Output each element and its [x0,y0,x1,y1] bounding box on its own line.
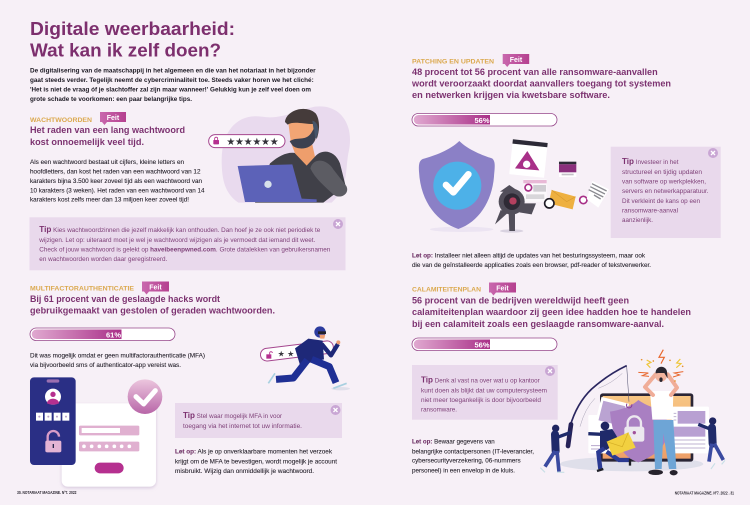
tip text: Tip Denk al vast na over wat u op kantoor [421,376,540,384]
note: let op patching: die van de geïnstalleerde applicaties zoals een browser, pdf-reader of tekstverwerker. [412,262,651,269]
badge: Feit [503,54,529,67]
panel: tip patching [611,147,721,238]
heading: kost onnoemelijk veel tijd. [30,137,144,147]
panel: tip MFA [175,403,342,438]
tip text: van software op werkplekken, [622,178,706,186]
section: calamiteitenplan [412,282,691,350]
progress bar: 56% [412,114,557,126]
heading: Het raden van een lang wachtwoord [30,125,185,135]
body text: karakters bijna 3.500 keer zoveel tijd als een wachtwoord van [30,178,203,185]
tip text: Tip Investeer in het [622,157,679,166]
intro text: grote schade te voorkomen: een paar belangrijke tips. [30,96,192,103]
illustration: man with laptop and password [209,106,350,203]
progress bar: 56%: 56% [474,340,490,349]
note: let op MFA: krijgt om de MFA te bevestigen, wordt mogelijk je account [175,458,337,466]
section label: MULTIFACTORAUTHENTICATIE [30,286,135,292]
heading: Bij 61 procent van de geslaagde hacks wordt [30,294,220,304]
section label: CALAMITEITENPLAN [412,286,481,294]
body text: hoofdletters, dan kost het raden van een wachtwoord van 12 [30,168,201,176]
heading: bij een calamiteit zoals een geslaagde ransomware-aanval. [412,319,664,329]
heading: calamiteitenplan waardoor zij geen idee hadden hoe te handelen [412,307,691,317]
progress bar: 56% [412,338,557,350]
note: let op MFA: misbruikt. Wijzig dan onmiddellijk je wachtwoord. [175,468,314,475]
heading [412,296,691,329]
illustration: man with laptop and password: ★★★★★★ [226,137,279,148]
progress bar: 56%: 56% [474,116,490,125]
body text [30,352,205,369]
title: Wat kan ik zelf doen? [30,40,221,60]
icon: close [330,405,340,415]
tip text [38,225,331,263]
note: let op patching [412,252,651,269]
note: let op calamiteitenplan: Let op: Bewaar gegevens van [412,438,495,446]
tip text: wijzigen. Let op: uiteraard moet je wel je wachtwoord wijzigen als je vermoedt dat iemand dit weet. [38,237,316,244]
heading: en netwerken krijgen via kwetsbare software. [412,90,610,100]
icon: close [333,219,343,229]
progress bar: 61% [30,328,175,340]
note: let op calamiteitenplan: cybersecurityverzekering, 06-nummers [412,458,521,465]
icon: close [545,366,555,376]
icon: close [708,148,718,158]
tip text: en wachtwoorden worden daar geregistreerd. [39,256,168,263]
section: wachtwoorden [30,112,205,204]
tip text: Tip Kies wachtwoordzinnen die jezelf makkelijk kan onthouden. Dan hoef je ze ook niet periodiek te [39,225,321,234]
heading [30,294,275,316]
heading [30,125,185,147]
badge: Feit: Feit [149,284,162,292]
tip text [622,157,709,224]
tip text: niet meer toegankelijk is door bijvoorbeeld [421,397,542,404]
tip text: toegang via het internet tot uw informatie. [183,423,302,430]
body text [30,159,205,204]
tip text: kunt doen als blijkt dat uw computersysteem [421,387,547,394]
tip text: aanzienlijk. [622,217,653,224]
note: let op calamiteitenplan: belangrijke contactpersonen (IT-leverancier, [412,448,534,455]
note: let op calamiteitenplan: personeel) in een envelop in de kluis. [412,467,515,474]
body text: 10 karakters (3 weken). Het raden van een wachtwoord van 14 [30,187,205,194]
progress bar: 61%: 61% [106,330,121,339]
intro text: De digitalisering van de maatschappij in het algemeen en die van het notariaat in het bijzonder [30,68,316,74]
tip text: ransomware. [421,406,457,414]
tip text: servers en netwerkapparatuur. [622,188,709,195]
intro text: gaat steeds verder. Tegelijk neemt de cybercriminaliteit toe. Steeds vaker horen we het cliché: [30,77,314,84]
tip text [421,376,547,414]
section: multifactorauthenticatie [30,282,275,369]
tip text: Check of jouw wachtwoord is gelekt op haveibeenpwned.com. Grote datalekken van gebruikersnamen [39,246,331,254]
body text: karakters kost zelfs meer dan 13 miljoen keer zoveel tijd! [30,196,189,204]
tip text: Dit verkleint de kans op een [622,198,701,205]
badge: Feit: Feit [107,115,120,122]
note: let op patching: Let op: Installeer niet alleen altijd de updates van het besturingssysteem, maar ook [412,252,646,260]
badge: Feit: Feit [496,286,509,292]
body text: via bijvoorbeeld sms of authenticator-app vereist was. [30,362,181,369]
note: let op calamiteitenplan [412,438,534,474]
body text: Dit was mogelijk omdat er geen multifactorauthenticatie (MFA) [30,352,205,360]
heading: gebruikgemaakt van gestolen of geraden wachtwoorden. [30,306,275,316]
tip text: Tip Stel waar mogelijk MFA in voor [183,411,282,420]
note: let op MFA [175,448,337,475]
section: patching en updaten [411,54,671,126]
heading [411,67,671,100]
illustration: running thief with password: ★★★ [278,350,304,359]
illustration: shield and malware [419,139,609,233]
note: let op MFA: Let op: Als je op onverklaarbare momenten het verzoek [175,448,333,456]
title [30,18,235,60]
section label: WACHTWOORDEN [30,117,92,124]
badge: Feit [142,282,169,294]
heading: wordt veroorzaakt doordat aanvallers toegang tot systemen [411,78,671,88]
panel: tip wachtwoorden [30,217,346,270]
heading: 56 procent van de bedrijven wereldwijd heeft geen [412,296,629,306]
footer left: 30. NOTARIAAT MAGAZINE. Nº7. 2022 [17,490,77,495]
tip text [183,411,302,430]
badge: Feit: Feit [510,57,523,64]
section label: PATCHING EN UPDATEN [412,58,494,66]
intro text: 'Het is niet de vraag óf je slachtoffer zal zijn maar wanneer!' Gelukkig kun je zelf veel doen om [30,86,311,94]
body text: Als een wachtwoord bestaat uit cijfers, kleine letters en [30,159,185,166]
intro text [30,68,316,103]
badge: Feit [489,282,516,296]
title: Digitale weerbaarheid: [30,18,235,39]
tip text: ransomware-aanval [622,207,678,214]
badge: Feit [100,112,126,125]
illustration: running thief with password [260,326,350,390]
illustration: phone and login card [30,377,162,487]
panel: tip calamiteitenplan [412,365,558,420]
heading: 48 procent tot 56 procent van alle ransomware-aanvallen [412,67,658,77]
illustration: phishing attack and worried man [540,350,725,475]
tip text: structureel en tijdig updaten [622,169,703,176]
